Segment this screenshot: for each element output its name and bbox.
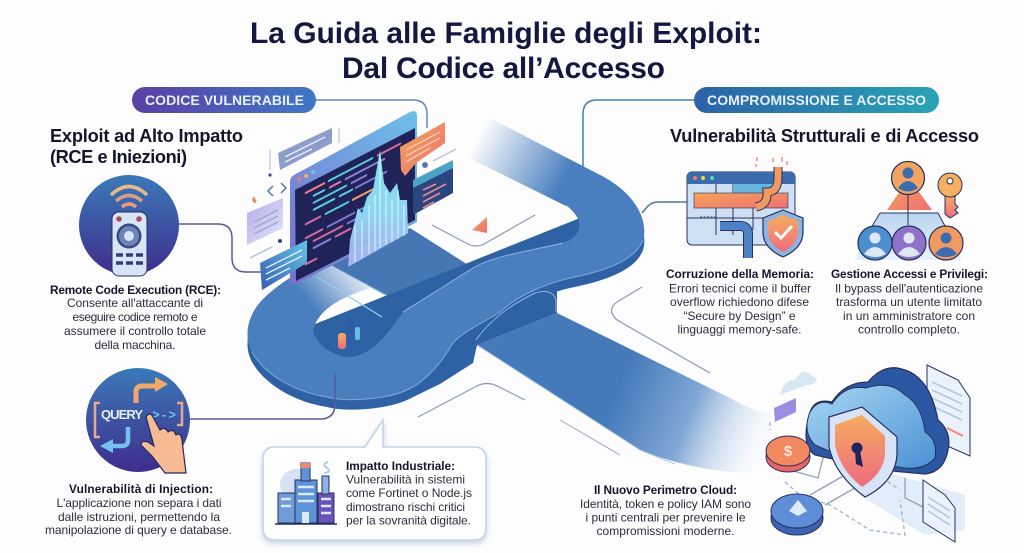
text: remote code execution: assumere il controllo totale (64, 324, 206, 338)
top grey panel (278, 128, 332, 170)
top document (927, 365, 970, 456)
small dot and line (422, 149, 456, 168)
text: vulnerabilità di injection: Vulnerabilità di Injection: (69, 482, 213, 496)
connector: access pill to ribbon (583, 100, 694, 168)
text: remote code execution: Remote Code Execution (RCE): (50, 283, 221, 297)
text: corruzione della memoria: “Secure by Design” e (684, 309, 796, 323)
ribbon top surface (247, 175, 644, 400)
text: gestione accessi e privilegi: Gestione Accessi e Privilegi: (831, 267, 988, 281)
text: remote code execution: della macchina. (94, 338, 176, 352)
text: gestione accessi e privilegi: in un amministratore con (843, 309, 975, 323)
ribbon fading loop end (255, 265, 370, 335)
icon: user hierarchy with key (855, 162, 963, 260)
icon: query with hand (86, 368, 190, 473)
central S-shaped isometric ribbon (247, 118, 800, 473)
callout: impatto industriale (263, 420, 486, 540)
heading: vulnerabilità strutturali: Vulnerabilità Strutturali e di Accesso (670, 126, 979, 146)
connector band under the screen (330, 228, 473, 308)
text: il nuovo perimetro cloud: i punti centrali per prevenire le (586, 510, 746, 524)
icon: query with hand: QUERY (101, 407, 143, 422)
icon: remote control with wifi (79, 175, 179, 276)
callout text (346, 459, 472, 528)
icon: orange coin: $ (784, 443, 793, 460)
lower band fading to the cloud (477, 313, 800, 473)
connector: code pill to screen (316, 100, 427, 128)
pill: compromissione e accesso: COMPROMISSIONE E ACCESSO (707, 92, 926, 108)
orange chat bubble (400, 122, 445, 176)
title (250, 17, 762, 85)
right teal panel (413, 160, 453, 215)
small code symbols (250, 128, 339, 258)
main screen frame (290, 111, 417, 284)
title: Dal Codice all’Accesso (342, 52, 665, 85)
ribbon side face (247, 185, 644, 410)
decorative platform outlines (317, 215, 710, 455)
icon: factory (275, 462, 337, 524)
icon: memory table with pipe and shield (687, 157, 803, 258)
icon: blue coin (771, 494, 823, 535)
text: vulnerabilità di injection (45, 482, 232, 537)
heading: exploit ad alto impatto (50, 126, 243, 167)
small lilac card (774, 398, 796, 422)
connector: memory icon to ribbon (642, 202, 687, 213)
text: gestione accessi e privilegi: trasforma un utente limitato (836, 295, 982, 309)
text: corruzione della memoria: linguaggi memory-safe. (678, 322, 802, 336)
text: corruzione della memoria: Corruzione della Memoria: (666, 267, 814, 281)
ribbon fading top end (463, 118, 604, 206)
icon: orange coin (766, 436, 810, 472)
callout text: per la sovranità digitale. (346, 514, 471, 528)
lower-left blue panel (260, 240, 307, 290)
skyline chart (348, 150, 408, 267)
shield with keyhole (829, 407, 897, 497)
text: gestione accessi e privilegi: controllo completo. (858, 322, 960, 336)
left doc panel (247, 198, 283, 245)
text: corruzione della memoria: overflow richiedono difese (670, 295, 809, 309)
icon: triangle marker on platform (472, 217, 487, 233)
icon: query with hand: >-> (152, 407, 176, 422)
text: il nuovo perimetro cloud: Il Nuovo Perimetro Cloud: (594, 483, 737, 497)
text: vulnerabilità di injection: L'applicazione non separa i dati (56, 496, 222, 510)
text: corruzione della memoria: Errori tecnici come il buffer (669, 282, 811, 296)
text: vulnerabilità di injection: dalle istruzioni, permettendo la (58, 510, 220, 524)
cloud (806, 368, 949, 474)
text: corruzione della memoria (666, 267, 814, 336)
connector: RCE icon to screen (178, 224, 262, 272)
title: La Guida alle Famiglie degli Exploit: (250, 17, 762, 50)
text: vulnerabilità di injection: manipolazione di query e database. (45, 523, 232, 537)
illustration: cloud with shield, coins and documents (766, 365, 970, 542)
heading: exploit ad alto impatto: Exploit ad Alto Impatto (50, 126, 243, 146)
code lines (306, 144, 400, 264)
pill: compromissione e accesso (694, 87, 939, 113)
heading: exploit ad alto impatto: (RCE e Iniezioni) (50, 147, 187, 167)
text: gestione accessi e privilegi (831, 267, 988, 336)
icon: small bar chart in loop (338, 318, 360, 349)
illustration: code screen and floating panels (247, 111, 456, 290)
pill: codice vulnerabile (132, 87, 316, 113)
text: remote code execution: Consente all'attaccante di (67, 296, 203, 310)
callout text: Vulnerabilità in sistemi (346, 472, 465, 486)
text: gestione accessi e privilegi: Il bypass dell'autenticazione (835, 282, 983, 296)
text: il nuovo perimetro cloud: compromissioni moderne. (596, 524, 734, 538)
callout text: come Fortinet o Node.js (346, 486, 472, 500)
text: remote code execution: eseguire codice remoto e (72, 310, 198, 324)
connector: query icon to ribbon (190, 373, 335, 419)
callout text: Impatto Industriale: (346, 459, 455, 473)
text: il nuovo perimetro cloud (580, 483, 751, 538)
bottom document (923, 480, 955, 542)
text: remote code execution (50, 283, 221, 352)
callout text: dimostrano rischi critici (346, 500, 465, 514)
text: il nuovo perimetro cloud: Identità, token e policy IAM sono (580, 497, 751, 511)
pill: codice vulnerabile: CODICE VULNERABILE (145, 92, 304, 108)
